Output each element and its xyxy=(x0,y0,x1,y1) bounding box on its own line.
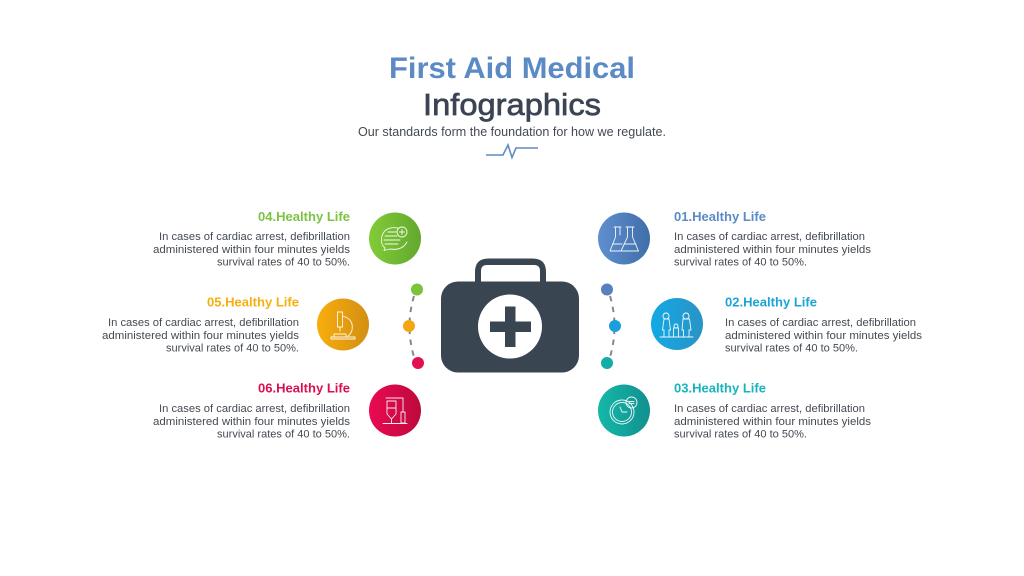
body text: survival rates of 40 to 50%. xyxy=(217,428,350,440)
body text: administered within four minutes yields xyxy=(674,244,871,256)
icon: stopwatch xyxy=(598,384,650,436)
body text: administered within four minutes yields xyxy=(102,330,299,342)
body text: In cases of cardiac arrest, defibrillation xyxy=(159,403,350,415)
icon: family xyxy=(651,298,703,350)
title: First Aid Medical xyxy=(389,52,635,85)
body text xyxy=(153,403,350,440)
icon: flasks xyxy=(598,212,650,264)
panel: item 04 xyxy=(153,210,421,268)
icon: IV drip xyxy=(369,384,421,436)
body text: In cases of cardiac arrest, defibrillation xyxy=(674,231,865,243)
body text: administered within four minutes yields xyxy=(153,416,350,428)
icon: heartbeat pulse line xyxy=(486,145,538,158)
panel: item 06 xyxy=(153,382,421,440)
body text: survival rates of 40 to 50%. xyxy=(674,256,807,268)
body text: In cases of cardiac arrest, defibrillation xyxy=(159,231,350,243)
body text: administered within four minutes yields xyxy=(725,330,922,342)
body text xyxy=(725,317,922,354)
heading: 03.Healthy Life xyxy=(674,382,766,396)
body text: survival rates of 40 to 50%. xyxy=(674,428,807,440)
icon: microscope xyxy=(317,298,369,350)
panel: item 05 xyxy=(102,296,369,354)
title: Infographics xyxy=(423,87,601,122)
body text: In cases of cardiac arrest, defibrillation xyxy=(108,317,299,329)
body text: In cases of cardiac arrest, defibrillation xyxy=(725,317,916,329)
subtitle: Our standards form the foundation for how we regulate. xyxy=(358,125,666,139)
body text xyxy=(102,317,299,354)
panel: item 01 xyxy=(598,210,871,268)
heading: 02.Healthy Life xyxy=(725,296,817,310)
body text: survival rates of 40 to 50%. xyxy=(725,342,858,354)
body text: administered within four minutes yields xyxy=(674,416,871,428)
heading: 04.Healthy Life xyxy=(258,210,350,224)
heading: 05.Healthy Life xyxy=(207,296,299,310)
panel: item 03 xyxy=(598,382,871,440)
body text: survival rates of 40 to 50%. xyxy=(217,256,350,268)
body text: survival rates of 40 to 50%. xyxy=(166,342,299,354)
body text xyxy=(153,231,350,268)
heading: 01.Healthy Life xyxy=(674,210,766,224)
body text: administered within four minutes yields xyxy=(153,244,350,256)
title xyxy=(389,52,635,122)
body text: In cases of cardiac arrest, defibrillation xyxy=(674,403,865,415)
body text xyxy=(674,231,871,268)
panel: item 02 xyxy=(651,296,922,354)
central first aid kit xyxy=(441,258,579,372)
heading: 06.Healthy Life xyxy=(258,382,350,396)
body text xyxy=(674,403,871,440)
connector: left dotted arc xyxy=(403,284,424,369)
connector: right dotted arc xyxy=(601,284,621,369)
icon: speech bubble xyxy=(369,212,421,264)
